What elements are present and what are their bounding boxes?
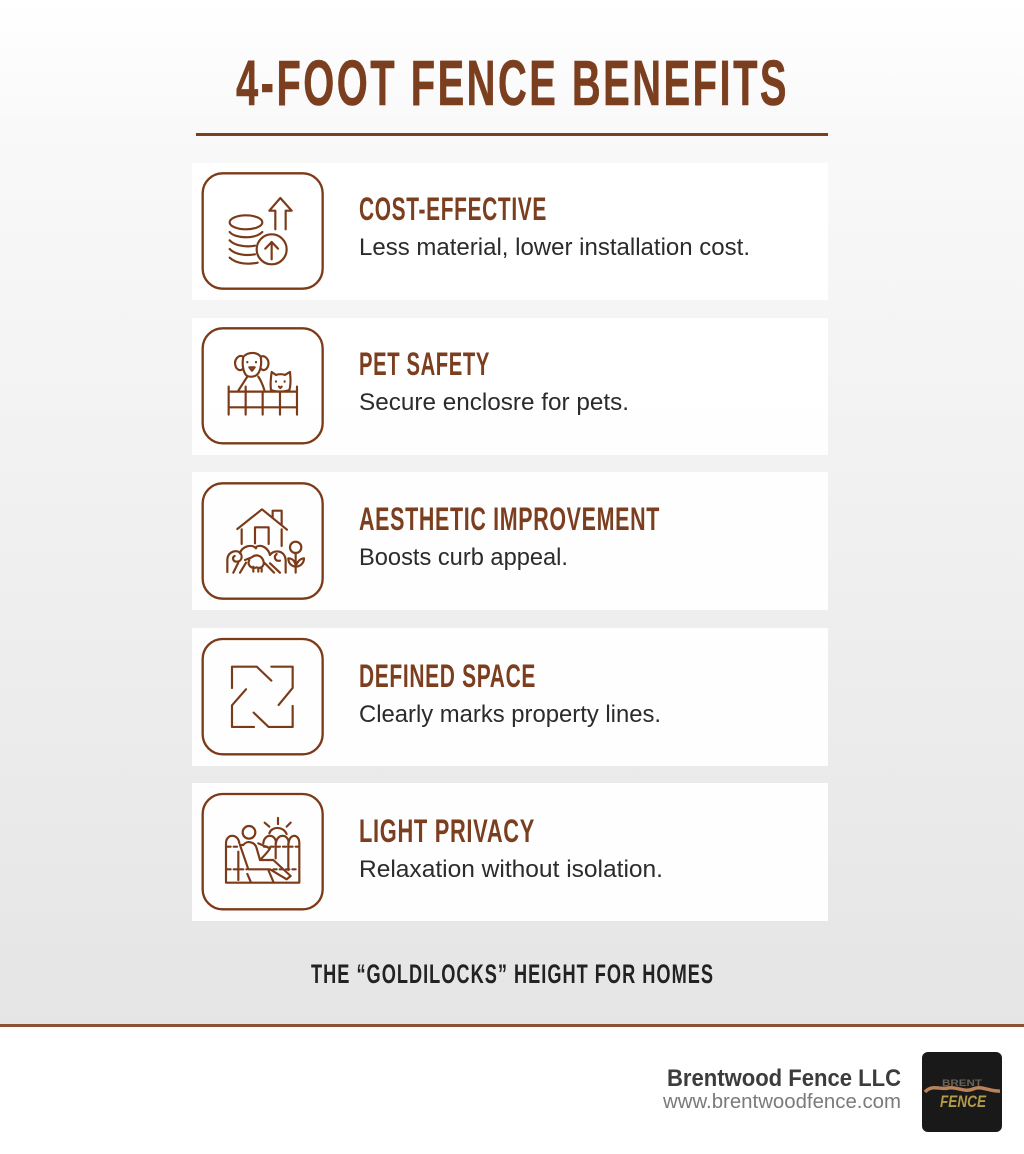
heading: light privacy: LIGHT PRIVACY (359, 813, 535, 849)
icon: house with garden (203, 483, 323, 599)
title underline (196, 133, 828, 136)
icon: coins with up arrows (203, 173, 323, 289)
logo: BRENT (942, 1078, 983, 1088)
icon: dog and cat behind fence (203, 328, 323, 443)
description: defined space: Clearly marks property lines. (359, 701, 661, 728)
panel: pet safety (192, 318, 828, 455)
footer (662, 1052, 1002, 1132)
tagline: THE “GOLDILOCKS” HEIGHT FOR HOMES (311, 959, 714, 989)
icon: four corner brackets (203, 639, 323, 754)
panel: defined space (192, 628, 828, 766)
description: aesthetic improvement: Boosts curb appeal. (359, 544, 568, 571)
panel: light privacy (192, 783, 828, 921)
footer divider (0, 1024, 1024, 1027)
description: light privacy: Relaxation without isolation. (359, 856, 663, 883)
panel: cost-effective (192, 163, 828, 300)
heading: aesthetic improvement: AESTHETIC IMPROVEMENT (359, 501, 660, 537)
description: pet safety: Secure enclosre for pets. (359, 389, 629, 416)
website: www.brentwoodfence.com (662, 1091, 901, 1113)
description: cost-effective: Less material, lower installation cost. (359, 234, 750, 261)
logo (922, 1052, 1002, 1132)
logo: FENCE (940, 1092, 987, 1111)
heading: defined space: DEFINED SPACE (359, 658, 536, 694)
heading: pet safety: PET SAFETY (359, 346, 490, 382)
company name: Brentwood Fence LLC (667, 1065, 901, 1092)
panel: aesthetic improvement (192, 472, 828, 610)
heading: cost-effective: COST-EFFECTIVE (359, 191, 547, 227)
icon: person relaxing by fence (203, 794, 323, 909)
